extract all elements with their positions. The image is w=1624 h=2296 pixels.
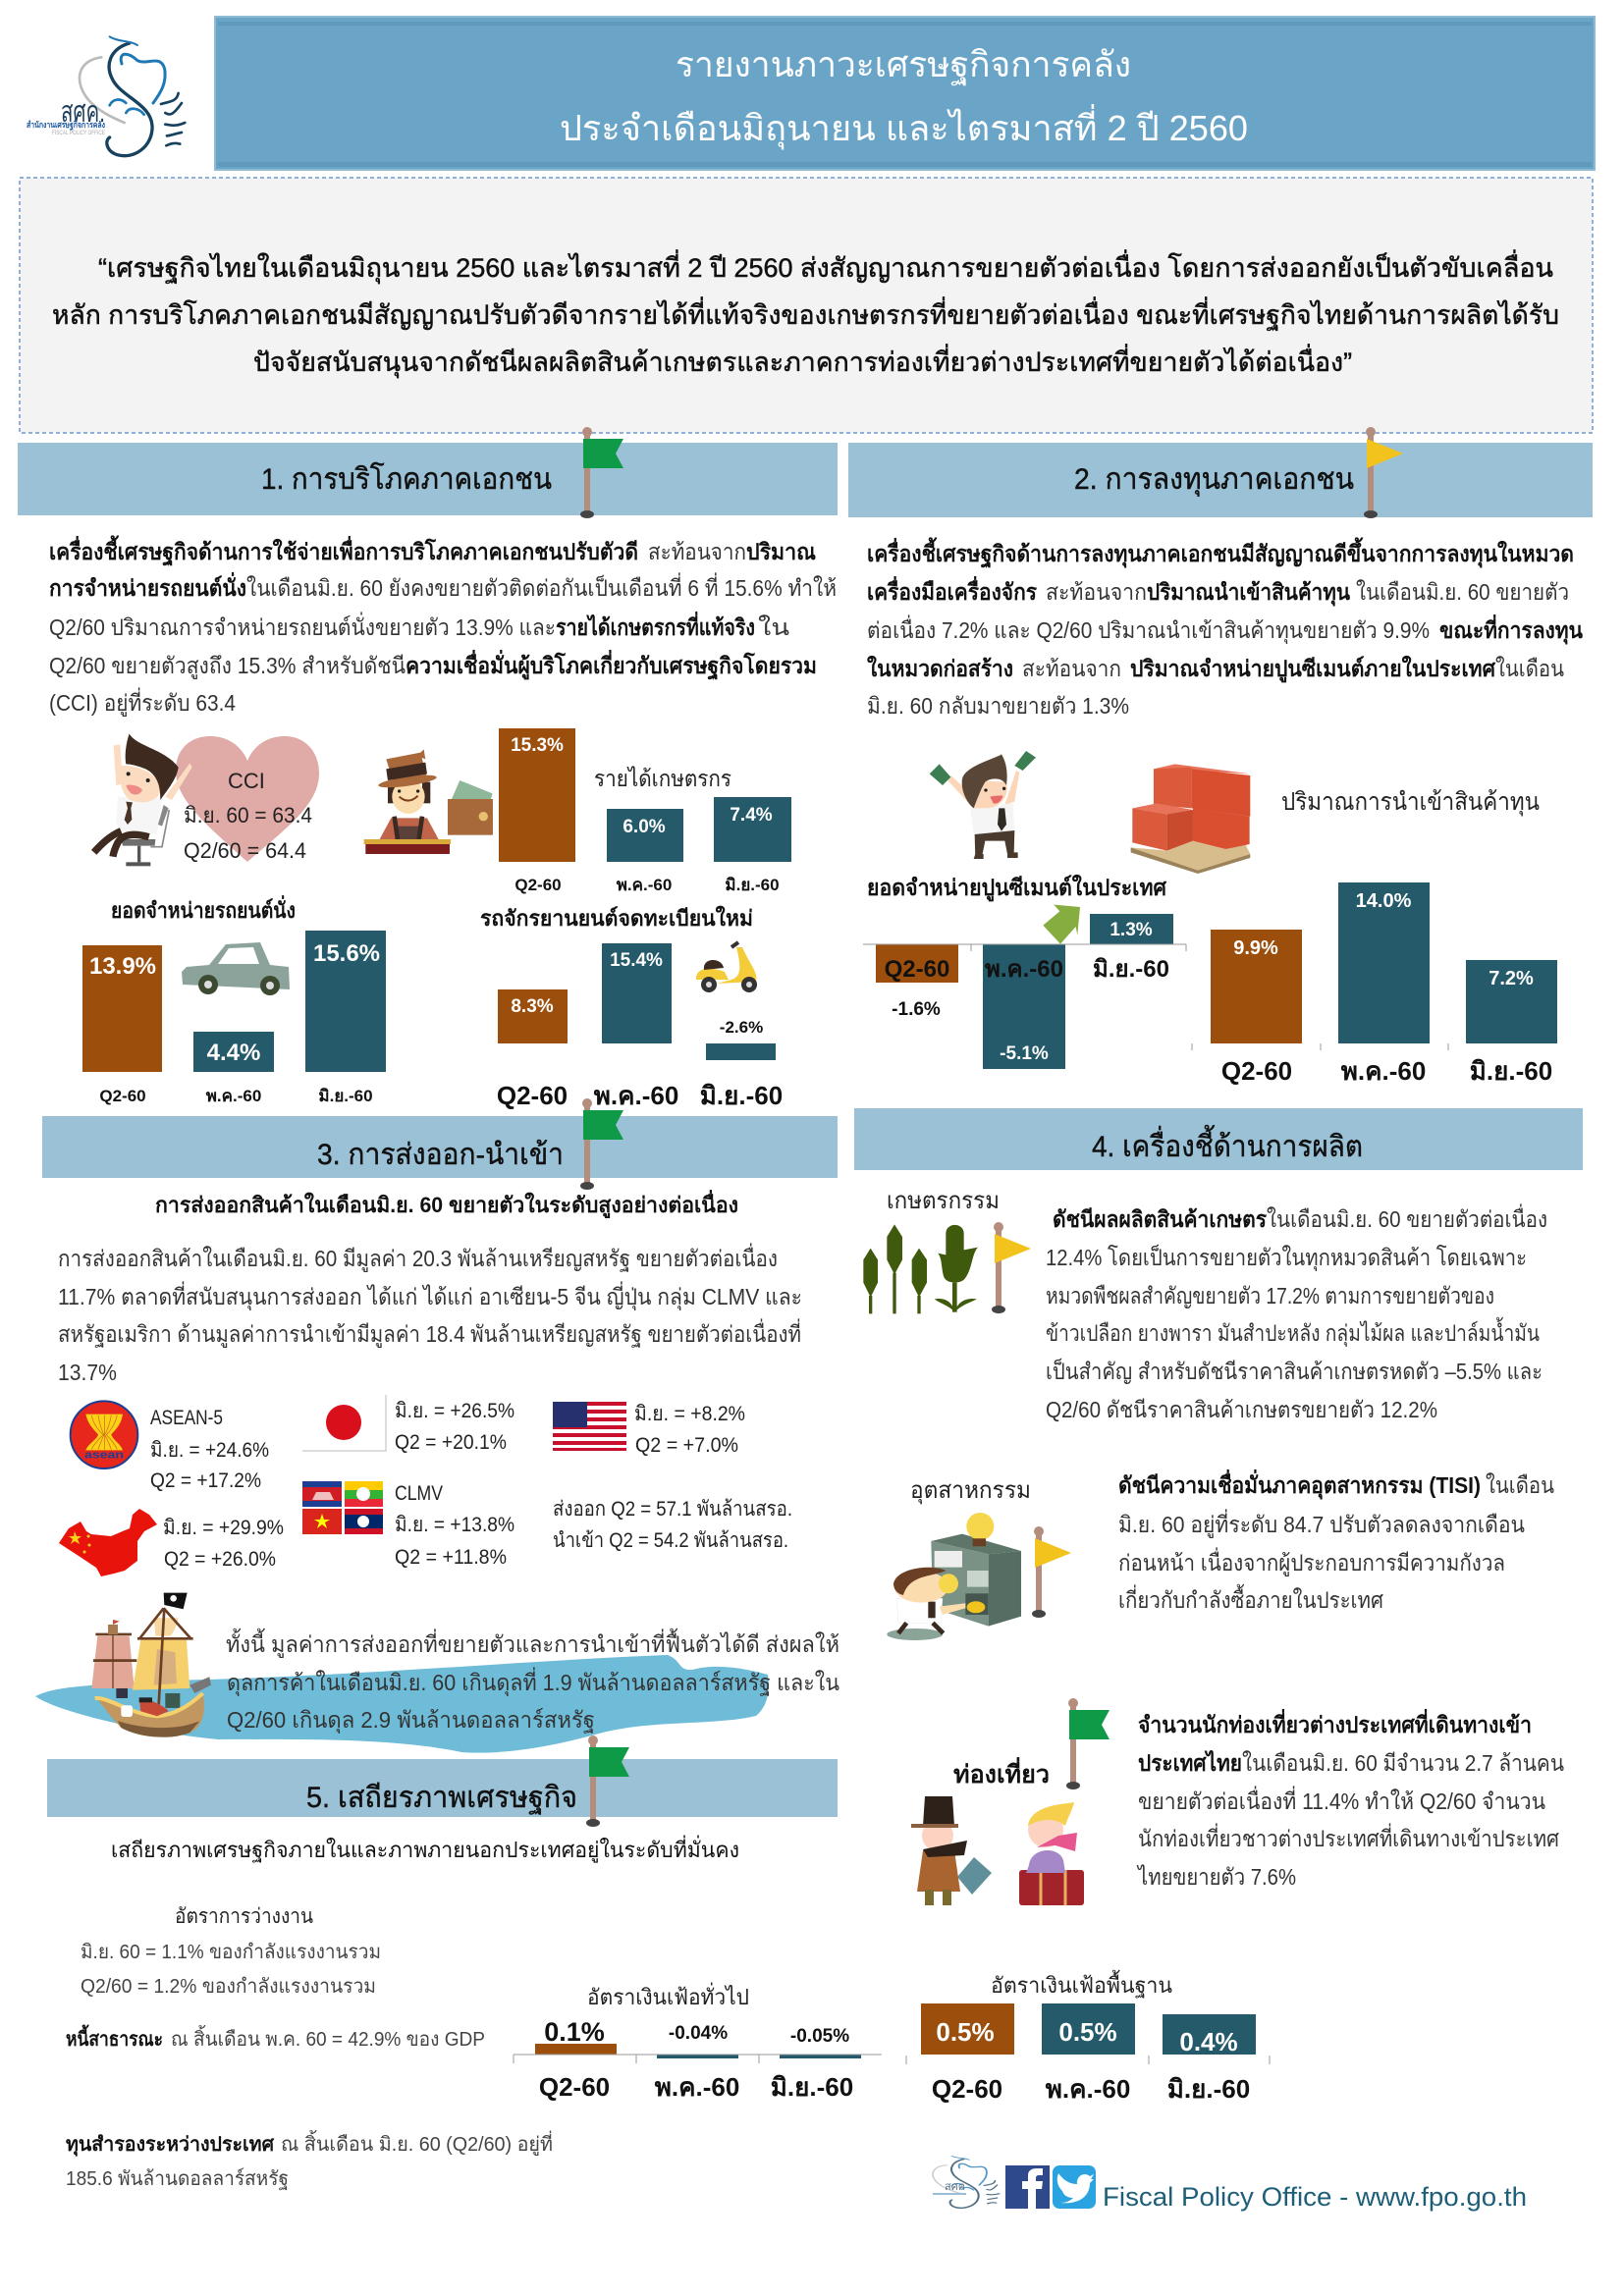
chart: farm income: รายได้เกษตรกร xyxy=(594,766,731,791)
chart: passenger car sales xyxy=(82,894,386,1105)
chart: core inflation: 0.5% xyxy=(936,2017,995,2047)
logo: สศค. xyxy=(61,96,105,129)
label: industry: อุตสาหกรรม xyxy=(910,1477,1031,1505)
text block: private consumption: สะท้อนจาก xyxy=(648,539,746,564)
chart: headline inflation: พ.ค.-60 xyxy=(655,2072,739,2102)
chart: core inflation: 0.4% xyxy=(1179,2027,1238,2056)
footer logo xyxy=(933,2157,1000,2208)
chart: new motorcycle registrations: -2.6% xyxy=(720,1018,763,1037)
icon: tourists xyxy=(911,1796,1084,1905)
chart: core inflation: พ.ค.-60 xyxy=(1046,2074,1130,2104)
text block: trade balance: ทั้งนี้ มูลค่าการส่งออกที่ขยายตัวและการนำเข้าที่ฟื้นตัวได้ดี ส่งผลให้ xyxy=(226,1629,839,1658)
chart: capital goods imports: Q2-60 xyxy=(1221,1056,1292,1086)
chart: farm income: Q2-60 xyxy=(514,876,562,894)
chart: domestic cement sales: -1.6% xyxy=(892,999,941,1020)
text block: public debt: ณ สิ้นเดือน พ.ค. 60 = 42.9% ของ GDP xyxy=(171,2025,485,2051)
chart: new motorcycle registrations: มิ.ย.-60 xyxy=(700,1081,783,1110)
chart: domestic cement sales: 1.3% xyxy=(1110,920,1153,940)
text block: tourism: ขยายตัวต่อเนื่องที่ 11.4% ทำให้ Q2/60 จำนวน xyxy=(1138,1786,1545,1814)
chart: farm income: มิ.ย.-60 xyxy=(725,876,780,894)
icon: wheat and corn xyxy=(863,1224,978,1313)
text block: industry: มิ.ย. 60 อยู่ที่ระดับ 84.7 ปรับตัวลดลงจากเดือน xyxy=(1118,1509,1525,1538)
logo xyxy=(27,36,185,156)
quote text xyxy=(52,249,1559,379)
icon: boxes on pallet xyxy=(1131,764,1250,874)
icon: CLMV flags xyxy=(302,1481,383,1534)
chart: capital goods imports: พ.ค.-60 xyxy=(1341,1056,1426,1086)
text block: agriculture xyxy=(1046,1203,1547,1422)
text block: private investment xyxy=(867,537,1583,719)
text block: private investment: สะท้อนจาก xyxy=(1022,656,1121,681)
chart: capital goods imports: 14.0% xyxy=(1356,890,1412,912)
text block: trade balance: ดุลการค้าในเดือนมิ.ย. 60 เกินดุลที่ 1.9 พันล้านดอลลาร์สหรัฐ และใน xyxy=(227,1667,839,1696)
section 5 heading: 5. เสถียรภาพเศรษฐกิจ xyxy=(306,1782,577,1815)
chart: capital goods imports: 9.9% xyxy=(1233,937,1278,959)
text block: trade balance xyxy=(226,1629,839,1734)
text block: private consumption: ปริมาณ xyxy=(746,539,816,564)
chart: farm income: 15.3% xyxy=(511,735,564,756)
icon: facebook xyxy=(1005,2165,1050,2209)
text block: private investment: ในหมวดก่อสร้าง xyxy=(867,655,1013,681)
CCI values xyxy=(184,769,312,863)
icon: flag of Japan xyxy=(302,1395,386,1451)
CLMV values: CLMV xyxy=(395,1482,443,1505)
icon: man at machine xyxy=(887,1513,1021,1640)
text block: agriculture: ข้าวเปลือก ยางพารา มันสำปะหลัง กลุ่มไม้ผล และปาล์มน้ำมัน xyxy=(1046,1317,1540,1347)
label: agriculture: เกษตรกรรม xyxy=(887,1188,1000,1214)
ASEAN values: ASEAN-5 xyxy=(150,1407,223,1429)
icon: green flag xyxy=(586,1735,629,1827)
chart: headline inflation: อัตราเงินเฟ้อทั่วไป xyxy=(587,1982,749,2009)
text block: private investment: ต่อเนื่อง 7.2% และ Q2/60 ปริมาณนำเข้าสินค้าทุนขยายตัว 9.9% xyxy=(867,614,1430,644)
chart: domestic cement sales: มิ.ย.-60 xyxy=(1093,956,1169,983)
text block: reserves xyxy=(66,2130,553,2190)
chart: new motorcycle registrations: Q2-60 xyxy=(497,1081,568,1110)
Q2 totals: ส่งออก Q2 = 57.1 พันล้านสรอ. xyxy=(553,1498,792,1521)
text block: unemployment: อัตราการว่างงาน xyxy=(175,1905,313,1928)
chart: passenger car sales: พ.ค.-60 xyxy=(206,1087,261,1105)
chart: new motorcycle registrations: 8.3% xyxy=(511,996,554,1017)
text block: exports xyxy=(58,1243,802,1385)
icon: ASEAN emblem xyxy=(71,1401,137,1468)
chart: headline inflation: มิ.ย.-60 xyxy=(771,2072,853,2102)
icon: green flag xyxy=(580,1098,623,1190)
chart: capital goods imports: มิ.ย.-60 xyxy=(1470,1056,1552,1086)
icon: twitter xyxy=(1053,2165,1096,2209)
Japan values: Q2 = +20.1% xyxy=(395,1431,507,1454)
section 1 heading xyxy=(18,443,838,515)
label: tourism: ท่องเที่ยว xyxy=(953,1757,1050,1789)
chart: core inflation: 0.5% xyxy=(1058,2017,1117,2047)
icon: yellow flag xyxy=(1364,427,1403,518)
section 3 heading: 3. การส่งออก-นำเข้า xyxy=(317,1139,564,1171)
logo: สำนักงานเศรษฐกิจการคลัง xyxy=(27,120,105,131)
text block: public debt xyxy=(66,2024,485,2051)
chart: farm income xyxy=(499,728,791,894)
section 2 heading: 2. การลงทุนภาคเอกชน xyxy=(1074,463,1354,498)
quote text: “เศรษฐกิจไทยในเดือนมิถุนายน 2560 และไตรมาสที่ 2 ปี 2560 ส่งสัญญาณการขยายตัวต่อเนื่อง โดยการส่งออกยังเป็นตัวขับเคลื่อน xyxy=(98,249,1553,285)
text block: industry xyxy=(1118,1468,1554,1613)
chart: domestic cement sales xyxy=(863,874,1186,1069)
text block: industry: เกี่ยวกับกำลังซื้อภายในประเทศ xyxy=(1118,1584,1383,1613)
CCI values: Q2/60 = 64.4 xyxy=(184,838,306,863)
text block: industry: ในเดือน xyxy=(1486,1472,1554,1498)
text block: private consumption: ความเชื่อมั่นผู้บริโภคเกี่ยวกับเศรษฐกิจโดยรวม xyxy=(406,649,817,680)
section 3 heading xyxy=(42,1116,838,1178)
text block: private consumption: Q2/60 ขยายตัวสูงถึง 15.3% สำหรับดัชนี xyxy=(49,653,406,679)
ASEAN values: Q2 = +17.2% xyxy=(150,1469,261,1492)
chart: passenger car sales: 15.6% xyxy=(313,940,380,967)
panel: summary quote xyxy=(20,178,1593,433)
icon: scooter xyxy=(696,942,757,992)
chart: headline inflation: -0.05% xyxy=(790,2026,849,2047)
text block: unemployment xyxy=(81,1905,381,1998)
chart: core inflation: มิ.ย.-60 xyxy=(1167,2074,1250,2104)
CCI values: CCI xyxy=(228,769,265,793)
text block: private investment: ปริมาณนำเข้าสินค้าทุน xyxy=(1147,579,1350,607)
text block: industry: ดัชนีความเชื่อมั่นภาคอุตสาหกรรม (TISI) xyxy=(1118,1468,1481,1500)
text block: public debt: หนี้สาธารณะ xyxy=(66,2024,163,2051)
title: ประจำเดือนมิถุนายน และไตรมาสที่ 2 ปี 2560 xyxy=(560,104,1248,150)
text block: exports: 11.7% ตลาดที่สนับสนุนการส่งออก ได้แก่ ได้แก่ อาเซียน-5 จีน ญี่ปุ่น กลุ่ม CLMV และ xyxy=(58,1281,802,1310)
chart: headline inflation: Q2-60 xyxy=(539,2072,610,2102)
text block: tourism: ประเทศไทย xyxy=(1138,1749,1242,1776)
section 4 heading xyxy=(854,1108,1583,1170)
header banner xyxy=(215,17,1595,170)
chart: farm income: 7.4% xyxy=(730,805,773,826)
chart: passenger car sales: 4.4% xyxy=(207,1040,260,1066)
China values xyxy=(163,1517,284,1571)
text block: private investment: สะท้อนจาก xyxy=(1046,579,1147,605)
chart: headline inflation: -0.04% xyxy=(669,2023,728,2044)
chart: passenger car sales: มิ.ย.-60 xyxy=(318,1087,373,1105)
chart: domestic cement sales: ยอดจำหน่ายปูนซีเมนต์ในประเทศ xyxy=(867,874,1166,902)
text block: private investment: ขณะที่การลงทุน xyxy=(1439,614,1583,645)
icon: green flag xyxy=(1066,1698,1110,1789)
quote text: ปัจจัยสนับสนุนจากดัชนีผลผลิตสินค้าเกษตรและภาคการท่องเที่ยวต่างประเทศที่ขยายตัวได้ต่อเนื่อง” xyxy=(253,344,1352,379)
chart: farm income: 6.0% xyxy=(623,817,666,837)
Q2 totals: นำเข้า Q2 = 54.2 พันล้านสรอ. xyxy=(553,1529,788,1552)
icon: CCI heart with office man xyxy=(94,733,319,866)
text block: private investment: ในเดือนมิ.ย. 60 ขยายตัว xyxy=(1356,579,1569,605)
text block: private consumption: ในเดือนมิ.ย. 60 ยังคงขยายตัวติดต่อกันเป็นเดือนที่ 6 ที่ 15.6% ทำให้ xyxy=(246,572,837,601)
subheading: stability: เสถียรภาพเศรษฐกิจภายในและภาพภายนอกประเทศอยู่ในระดับที่มั่นคง xyxy=(111,1835,739,1863)
logo: FISCAL POLICY OFFICE xyxy=(52,131,105,136)
text block: private investment: ปริมาณจำหน่ายปูนซีเมนต์ภายในประเทศ xyxy=(1130,655,1495,683)
text block: tourism: นักท่องเที่ยวชาวต่างประเทศที่เดินทางเข้าประเทศ xyxy=(1138,1823,1559,1851)
chart: domestic cement sales: -5.1% xyxy=(1000,1043,1049,1064)
text block: private investment: ในเดือน xyxy=(1495,656,1564,681)
text block: trade balance: Q2/60 เกินดุล 2.9 พันล้านดอลลาร์สหรัฐ xyxy=(227,1707,595,1734)
icon: flag of USA xyxy=(553,1402,626,1451)
text block: industry: ก่อนหน้า เนื่องจากผู้ประกอบการมีความกังวล xyxy=(1118,1547,1505,1576)
text block: agriculture: เป็นสำคัญ สำหรับดัชนีราคาสินค้าเกษตรหดตัว –5.5% และ xyxy=(1046,1357,1543,1384)
Japan values: มิ.ย. = +26.5% xyxy=(395,1400,514,1422)
icon: farmer with wallet xyxy=(364,749,493,854)
text block: tourism: ในเดือนมิ.ย. 60 มีจำนวน 2.7 ล้านคน xyxy=(1242,1750,1564,1776)
chart: core inflation: อัตราเงินเฟ้อพื้นฐาน xyxy=(991,1970,1172,1999)
quote text: หลัก การบริโภคภาคเอกชนมีสัญญาณปรับตัวดีจากรายได้ที่แท้จริงของเกษตรกรที่ขยายตัวต่อเนื่อง ขณะที่เศรษฐกิจไทยด้านการผลิตได้รับ xyxy=(52,296,1559,331)
text block: private consumption: ใน xyxy=(758,614,789,640)
section 2 heading xyxy=(848,443,1593,517)
text block: private consumption: การจำหน่ายรถยนต์นั่ง xyxy=(49,571,246,601)
Japan values xyxy=(395,1400,514,1454)
text block: private investment: มิ.ย. 60 กลับมาขยายตัว 1.3% xyxy=(867,693,1129,719)
icon: map of China xyxy=(59,1509,157,1576)
chart: new motorcycle registrations: รถจักรยานยนต์จดทะเบียนใหม่ xyxy=(480,905,753,931)
text block: unemployment: Q2/60 = 1.2% ของกำลังแรงงานรวม xyxy=(81,1976,376,1998)
section 4 heading: 4. เครื่องชี้ด้านการผลิต xyxy=(1092,1125,1363,1163)
chart: capital goods imports: 7.2% xyxy=(1489,968,1534,989)
text block: exports: 13.7% xyxy=(58,1360,117,1385)
text block: exports: สหรัฐอเมริกา ด้านมูลค่าการนำเข้ามีมูลค่า 18.4 พันล้านเหรียญสหรัฐ ขยายตัวต่อเนื่องที่ xyxy=(58,1318,801,1348)
text block: tourism xyxy=(1136,1708,1564,1890)
text block: agriculture: ในเดือนมิ.ย. 60 ขยายตัวต่อเนื่อง xyxy=(1267,1203,1547,1232)
title: รายงานภาวะเศรษฐกิจการคลัง xyxy=(676,44,1131,86)
text block: reserves: 185.6 พันล้านดอลลาร์สหรัฐ xyxy=(66,2167,289,2190)
text block: agriculture: ดัชนีผลผลิตสินค้าเกษตร xyxy=(1053,1206,1268,1232)
icon: yellow flag xyxy=(992,1222,1031,1313)
chart: farm income: พ.ค.-60 xyxy=(617,876,672,894)
text block: private consumption: เครื่องชี้เศรษฐกิจด้านการใช้จ่ายเพื่อการบริโภคภาคเอกชนปรับตัวดี xyxy=(49,535,638,566)
water blob xyxy=(35,1655,769,1753)
chart: headline inflation: 0.1% xyxy=(544,2017,605,2047)
chart: headline inflation xyxy=(514,1982,882,2102)
arrow: rising xyxy=(1043,905,1080,944)
USA values xyxy=(634,1403,745,1457)
title xyxy=(560,44,1248,150)
text block: reserves: ณ สิ้นเดือน มิ.ย. 60 (Q2/60) อยู่ที่ xyxy=(281,2130,553,2157)
CLMV values xyxy=(395,1482,514,1569)
chart: capital goods imports xyxy=(1192,882,1557,1086)
subheading: exports: การส่งออกสินค้าในเดือนมิ.ย. 60 ขยายตัวในระดับสูงอย่างต่อเนื่อง xyxy=(155,1189,738,1219)
chart: domestic cement sales: พ.ค.-60 xyxy=(985,956,1063,983)
USA values: Q2 = +7.0% xyxy=(635,1434,738,1457)
section 5 heading xyxy=(47,1759,838,1817)
icon: pirate ship xyxy=(91,1593,211,1737)
CLMV values: มิ.ย. = +13.8% xyxy=(395,1514,514,1536)
icon: ASEAN emblem: asean xyxy=(84,1450,124,1462)
CCI values: มิ.ย. 60 = 63.4 xyxy=(184,803,312,828)
icon: yellow flag xyxy=(1032,1526,1071,1618)
chart: new motorcycle registrations xyxy=(480,905,783,1110)
footer text: Fiscal Policy Office - www.fpo.go.th xyxy=(1103,2182,1527,2212)
chart: passenger car sales: ยอดจำหน่ายรถยนต์นั่ง xyxy=(111,894,296,923)
text block: private consumption: Q2/60 ปริมาณการจำหน่ายรถยนต์นั่งขยายตัว 13.9% และ xyxy=(49,612,556,640)
text block: reserves: ทุนสำรองระหว่างประเทศ xyxy=(66,2134,275,2157)
text block: private consumption: (CCI) อยู่ที่ระดับ 63.4 xyxy=(49,687,236,717)
USA values: มิ.ย. = +8.2% xyxy=(634,1403,745,1425)
chart: passenger car sales: 13.9% xyxy=(89,953,156,980)
chart: core inflation xyxy=(906,1970,1270,2104)
chart: core inflation: Q2-60 xyxy=(932,2074,1002,2104)
chart: new motorcycle registrations: พ.ค.-60 xyxy=(594,1081,678,1110)
icon: green flag xyxy=(580,427,623,518)
text block: private investment: เครื่องชี้เศรษฐกิจด้านการลงทุนภาคเอกชนมีสัญญาณดีขึ้นจากการลงทุนในหมวด xyxy=(867,537,1574,568)
text block: private consumption: รายได้เกษตรกรที่แท้จริง xyxy=(556,611,755,640)
CLMV values: Q2 = +11.8% xyxy=(395,1546,507,1569)
label: capital goods imports: ปริมาณการนำเข้าสินค้าทุน xyxy=(1281,788,1540,817)
text block: tourism: จำนวนนักท่องเที่ยวต่างประเทศที่เดินทางเข้า xyxy=(1138,1708,1532,1737)
Q2 totals xyxy=(553,1498,792,1552)
ASEAN values: มิ.ย. = +24.6% xyxy=(150,1439,269,1462)
icon: car xyxy=(182,942,290,995)
text block: agriculture: หมวดพืชผลสำคัญขยายตัว 17.2% ตามการขยายตัวของ xyxy=(1046,1283,1494,1308)
text block: agriculture: 12.4% โดยเป็นการขยายตัวในทุกหมวดสินค้า โดยเฉพาะ xyxy=(1046,1243,1527,1271)
footer logo: สศค xyxy=(945,2181,965,2193)
chart: passenger car sales: Q2-60 xyxy=(99,1087,146,1105)
text block: private consumption xyxy=(49,535,837,717)
section 1 heading: 1. การบริโภคภาคเอกชน xyxy=(261,461,552,496)
China values: มิ.ย. = +29.9% xyxy=(163,1517,284,1539)
text block: exports: การส่งออกสินค้าในเดือนมิ.ย. 60 มีมูลค่า 20.3 พันล้านเหรียญสหรัฐ ขยายตัวต่อเนื่อง xyxy=(58,1243,778,1272)
ASEAN values xyxy=(150,1407,269,1492)
text block: agriculture: Q2/60 ดัชนีราคาสินค้าเกษตรขยายตัว 12.2% xyxy=(1046,1397,1437,1422)
chart: domestic cement sales: Q2-60 xyxy=(885,956,949,983)
icon: man holding money xyxy=(930,751,1036,859)
text block: private investment: เครื่องมือเครื่องจักร xyxy=(867,575,1038,605)
text block: tourism: ไทยขยายตัว 7.6% xyxy=(1136,1864,1296,1890)
text block: unemployment: มิ.ย. 60 = 1.1% ของกำลังแรงงานรวม xyxy=(81,1942,381,1963)
China values: Q2 = +26.0% xyxy=(164,1548,276,1571)
chart: new motorcycle registrations: 15.4% xyxy=(610,950,663,971)
